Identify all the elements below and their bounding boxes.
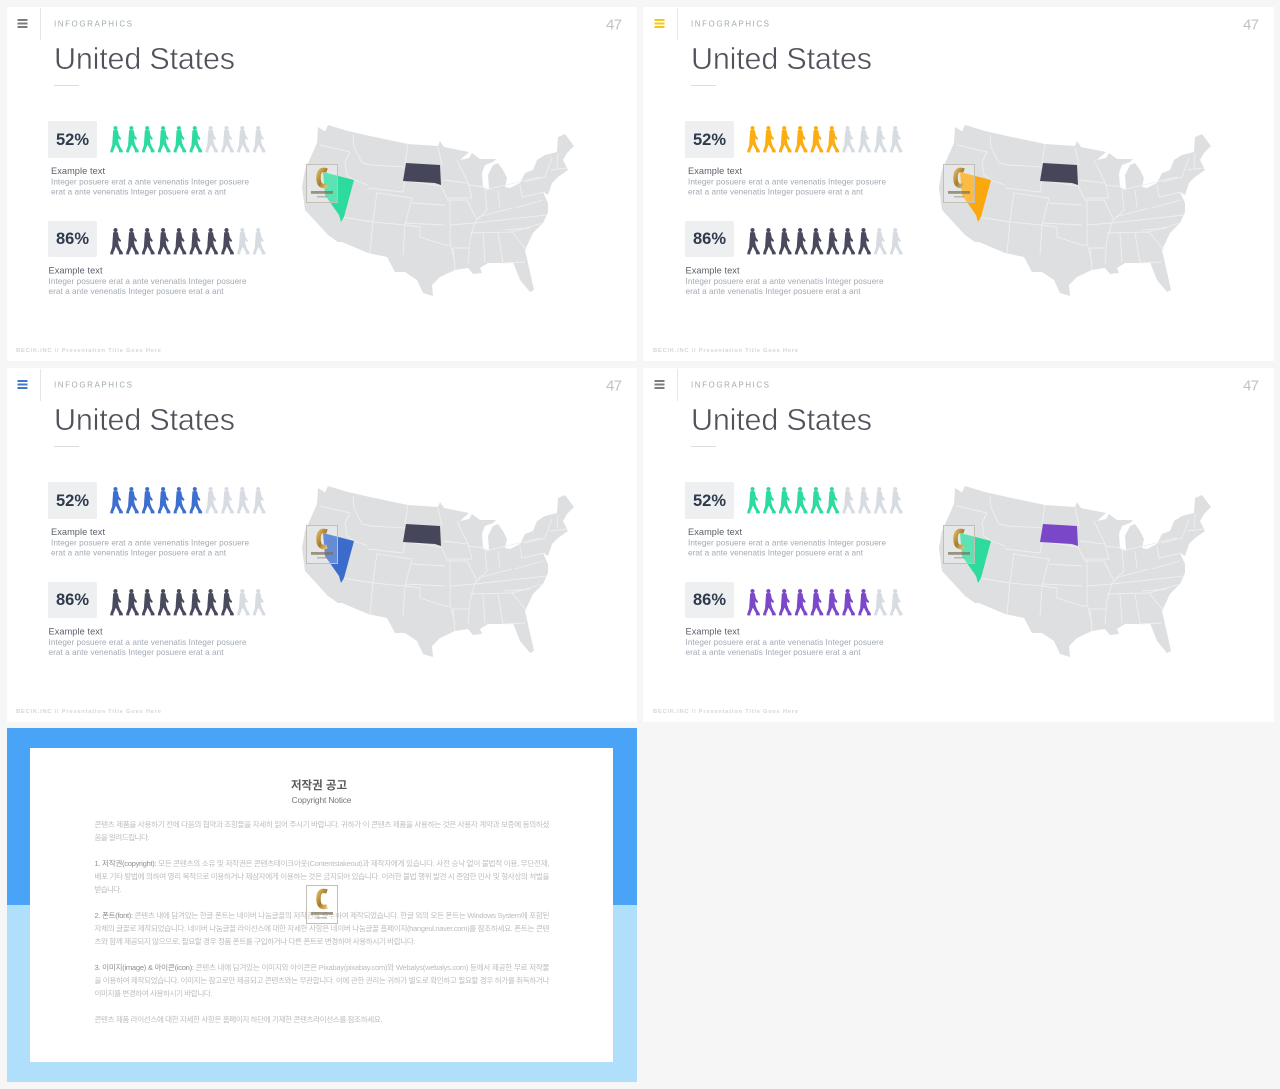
stat: 52%: erat a ante venenatis Integer posuere erat a ant — [51, 188, 227, 196]
text block: license note: 콘텐츠 제품 라이선스에 대한 자세한 사항은 홈페이지 하단에 기재한 콘텐츠라이선스를 참조하세요. — [94, 1014, 382, 1024]
panel: blue slide — [7, 368, 637, 722]
text block: introduction: 음을 알려드립니다. — [94, 832, 150, 842]
icon: menu — [18, 380, 28, 389]
stat: 86%: erat a ante venenatis Integer posuere erat a ant — [686, 648, 861, 657]
stat: 52%: Example text — [688, 527, 742, 537]
subheading: Copyright Notice — [292, 795, 352, 805]
stat: 52%: Example text — [51, 166, 105, 176]
panel: copyright notice — [7, 728, 637, 1082]
stat: 86% — [685, 582, 903, 657]
stat: 86%: erat a ante venenatis Integer posuere erat a ant — [686, 287, 861, 296]
text block: image clause: 을 이용하여 제작되었습니다. 이미지는 참고로만 제공되고 콘텐츠와는 무관합니다. 이에 관한 권리는 귀하가 별도로 확인하고 필요할 경우 허가를 취득하거나 — [94, 975, 550, 985]
page number: 47 — [1243, 16, 1259, 34]
title: United States — [54, 403, 235, 437]
page number: 47 — [1243, 378, 1259, 394]
stat: 86%: erat a ante venenatis Integer posuere erat a ant — [48, 287, 224, 296]
text block: image clause: 3. 이미지(image) & 아이콘(icon): 콘텐츠 내에 담겨있는 이미지와 아이콘은 Pixabay(pixabay.com)와 Webalys(webalys.com) 등에서 제공한 무료 저작물 — [94, 962, 550, 972]
stat: 52%: Integer posuere erat a ante venenatis Integer posuere — [688, 538, 886, 548]
stat: 52%: Example text — [688, 166, 742, 176]
text block: image clause — [94, 962, 550, 998]
stat: 86%: Example text — [686, 266, 740, 276]
stat: 86%: erat a ante venenatis Integer posuere erat a ant — [48, 648, 224, 657]
footer: BECIK.INC // Presentation Title Goes Here — [653, 348, 799, 354]
map: United States — [939, 125, 1211, 296]
panel: orange slide — [643, 7, 1274, 361]
stat: 86%: Integer posuere erat a ante venenatis Integer posuere — [686, 638, 884, 647]
text block: copyright clause: 1. 저작권(copyright): 모든 콘텐츠의 소유 및 저작권은 콘텐츠테이크아웃(Contentstakeout)과 제작자에게 있습니다. 사전 승낙 없이 불법적 이용, 무단전재, — [94, 858, 550, 868]
section label: INFOGRAPHICS — [691, 20, 769, 28]
stat: 52% — [48, 482, 266, 558]
stat: 52%: 52% — [56, 492, 89, 510]
footer: BECIK.INC // Presentation Title Goes Here — [16, 709, 162, 715]
stat: 52%: 52% — [693, 492, 726, 510]
stat: 86%: Example text — [48, 266, 103, 276]
stat: 86%: Example text — [48, 626, 103, 636]
stat: 52%: Example text — [51, 527, 105, 537]
footer: BECIK.INC // Presentation Title Goes Here — [653, 709, 799, 715]
text block: font clause: 자체의 글꼴로 제작되었습니다. 네이버 나눔글꼴 라이선스에 대한 자세한 사항은 네이버 나눔글꼴 홈페이지(hangeul.naver.com)를 참조하세요. 폰트는 콘텐 — [94, 923, 550, 933]
panel: green and purple slide — [643, 368, 1274, 722]
stat: 86%: 86% — [693, 230, 726, 248]
stat: 86% — [48, 582, 266, 657]
title: United States — [691, 403, 872, 437]
stat: 86% — [48, 221, 266, 296]
stat: 52%: 52% — [693, 131, 726, 149]
stat: 86%: Integer posuere erat a ante venenatis Integer posuere — [48, 638, 247, 647]
stat: 52%: erat a ante venenatis Integer posuere erat a ant — [51, 548, 227, 558]
stat: 52% — [48, 121, 266, 196]
footer: BECIK.INC // Presentation Title Goes Here — [16, 348, 162, 354]
panel: green slide — [7, 7, 637, 361]
map: United States — [302, 125, 574, 296]
stat: 86% — [685, 221, 903, 296]
section label: INFOGRAPHICS — [691, 380, 769, 390]
page number: 47 — [606, 16, 622, 34]
text block: copyright clause: 배포 기타 방법에 의하여 영리 목적으로 이용하거나 제삼자에게 이용하는 것은 금지되어 있습니다. 이러한 불법 행위 발견 시 준엄한 민사 및 형사상의 처벌을 — [94, 871, 550, 881]
stat: 52%: 52% — [56, 131, 89, 149]
section label: INFOGRAPHICS — [54, 380, 132, 390]
icon: menu — [18, 19, 28, 28]
stat: 86%: Example text — [686, 626, 740, 636]
title: United States — [691, 42, 872, 76]
stat: 52%: Integer posuere erat a ante venenatis Integer posuere — [51, 178, 249, 186]
icon: menu — [654, 19, 664, 28]
stat: 86%: 86% — [56, 230, 89, 248]
stat: 52%: Integer posuere erat a ante venenatis Integer posuere — [51, 538, 249, 548]
stat: 86%: Integer posuere erat a ante venenatis Integer posuere — [686, 277, 884, 286]
map: United States — [302, 486, 574, 657]
text block: introduction: 콘텐츠 제품을 사용하기 전에 다음의 협약과 조항들을 자세히 읽어 주시기 바랍니다. 귀하가 이 콘텐츠 제품을 사용하는 것은 사용자 계약과 보증에 동의하셨 — [94, 819, 550, 829]
page number: 47 — [606, 378, 622, 394]
stat: 52% — [685, 482, 903, 558]
stat: 86%: 86% — [693, 591, 726, 609]
stat: 52%: Integer posuere erat a ante venenatis Integer posuere — [688, 178, 886, 186]
text block: introduction — [94, 819, 550, 842]
text block: image clause: 이미지를 변경하여 사용하시기 바랍니다. — [94, 988, 212, 998]
map: United States — [939, 486, 1211, 657]
text block: copyright clause — [94, 858, 550, 894]
text block: font clause — [94, 910, 550, 946]
icon: watermark — [306, 886, 338, 924]
stat: 86%: 86% — [56, 591, 89, 609]
section label: INFOGRAPHICS — [54, 20, 132, 28]
stat: 86%: Integer posuere erat a ante venenatis Integer posuere — [48, 277, 247, 286]
stat: 52%: erat a ante venenatis Integer posuere erat a ant — [688, 188, 864, 196]
heading: copyright notice: 저작권 공고 — [291, 778, 347, 792]
icon: menu — [654, 380, 664, 389]
text block: font clause: 2. 폰트(font): 콘텐츠 내에 담겨있는 한글 폰트는 네이버 나눔글꼴의 저작권을 준수하여 제작되었습니다. 한글 외의 모든 폰트는 Windows System에 포함된 — [94, 910, 550, 920]
text block: copyright clause: 받습니다. — [94, 884, 122, 894]
text block: font clause: 츠와 함께 제공되지 않으므로, 필요할 경우 정품 폰트를 구입하거나 다른 폰트로 변경하여 사용하시기 바랍니다. — [94, 936, 416, 946]
stat: 52%: erat a ante venenatis Integer posuere erat a ant — [688, 548, 864, 558]
title: United States — [54, 42, 235, 76]
stat: 52% — [685, 121, 903, 196]
